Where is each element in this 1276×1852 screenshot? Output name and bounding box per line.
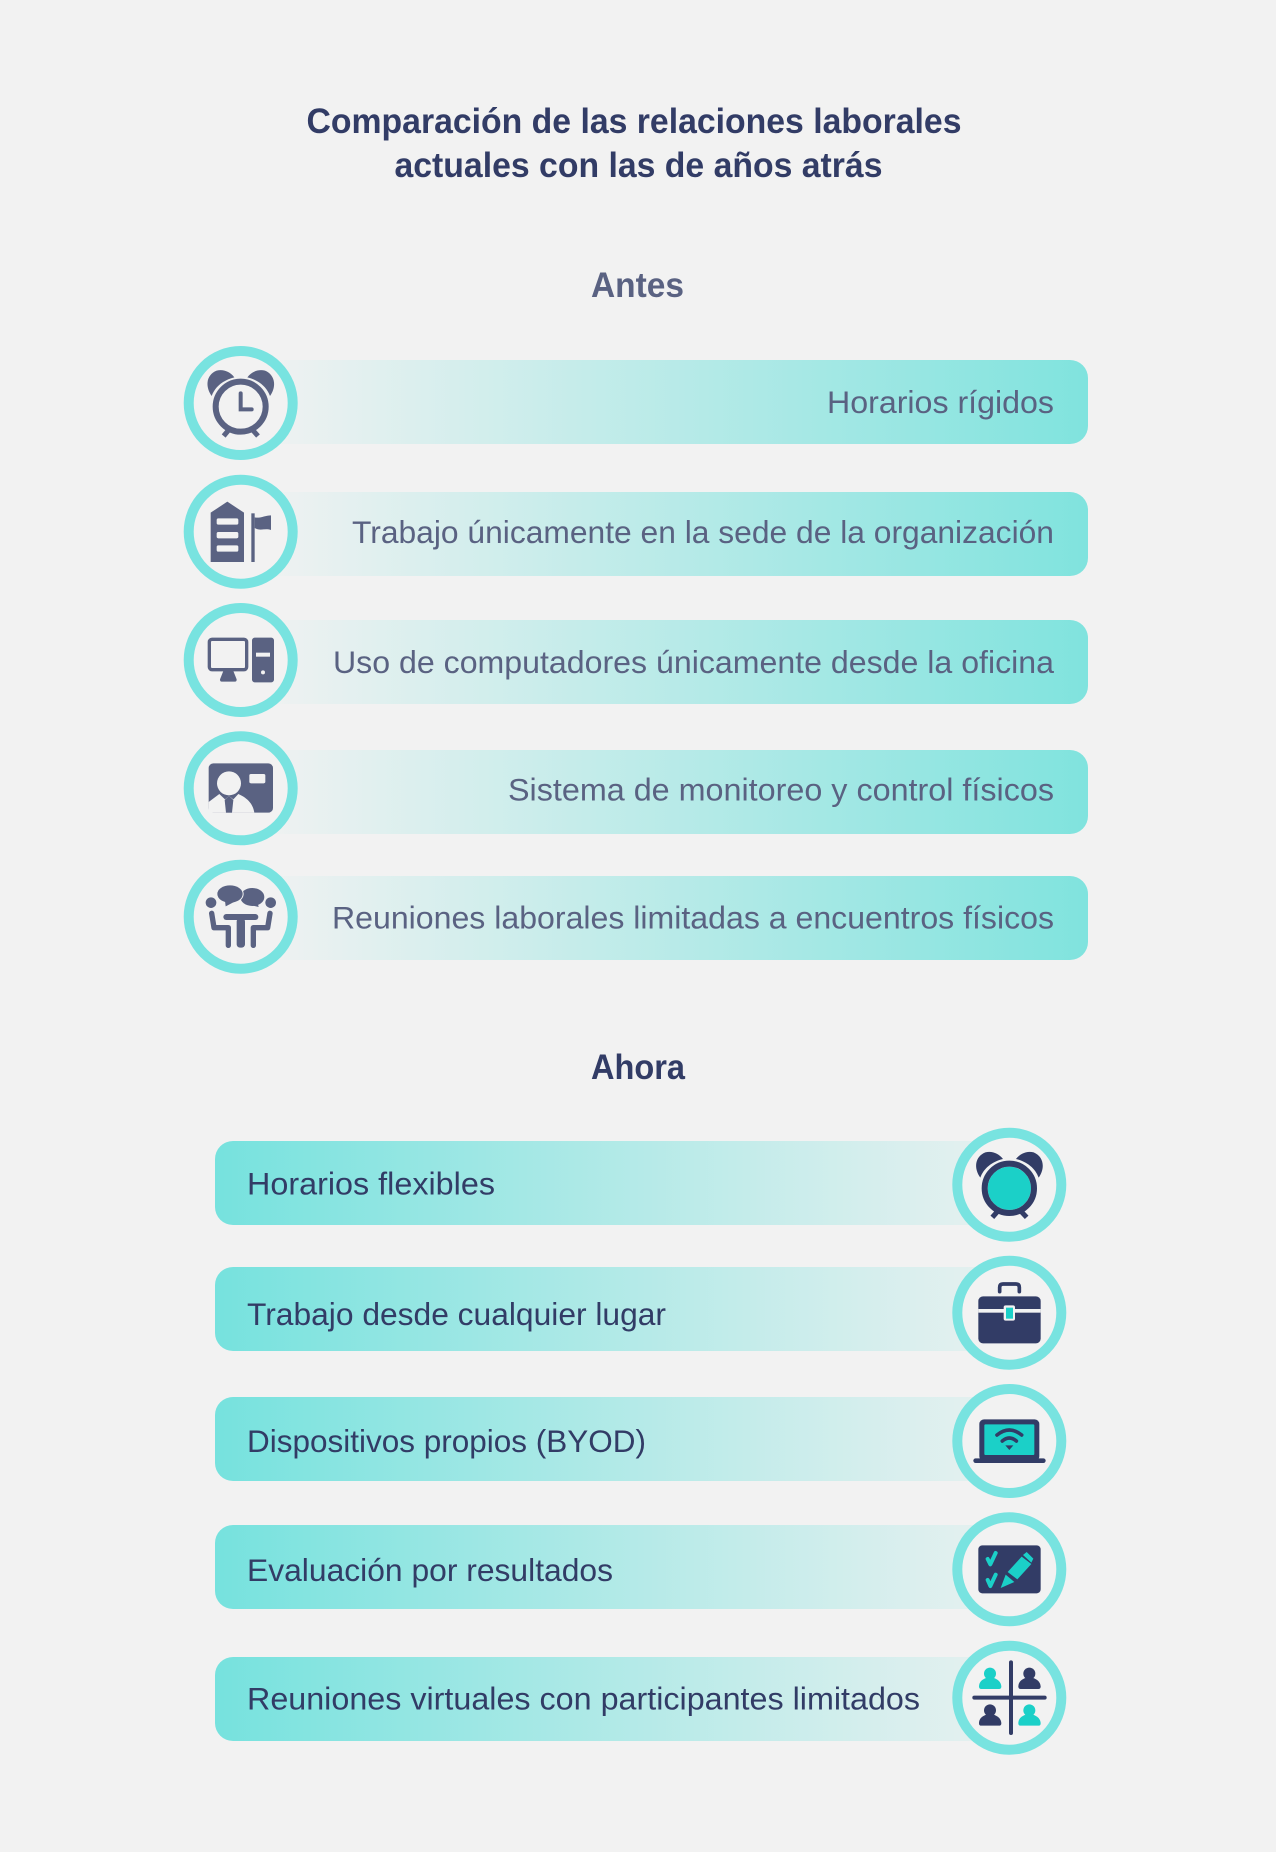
label: Dispositivos propios (BYOD) — [247, 1423, 646, 1459]
icon: briefcase — [978, 1284, 1041, 1343]
row: Dispositivos propios — [215, 1389, 1061, 1493]
row: Uso de computadores — [189, 608, 1088, 712]
bar — [245, 492, 1088, 576]
ring — [957, 1133, 1061, 1237]
row: Evaluación por resultados — [215, 1517, 1061, 1621]
icon: alarm clock teal — [976, 1152, 1043, 1217]
title: actuales con las de años atrás — [394, 146, 882, 185]
label: Horarios rígidos — [827, 384, 1054, 420]
label: Uso de computadores únicamente desde la oficina — [333, 644, 1054, 680]
ring — [957, 1261, 1061, 1365]
ring — [189, 351, 293, 455]
bar — [215, 1141, 1040, 1225]
bar — [245, 750, 1088, 834]
label: Reuniones virtuales con participantes limitados — [247, 1680, 920, 1716]
label: Evaluación por resultados — [247, 1552, 613, 1588]
row: Reuniones virtuales — [215, 1646, 1061, 1750]
icon: checklist board and pencil — [978, 1545, 1041, 1593]
title: Comparación de las relaciones laborales — [306, 102, 962, 141]
ring — [189, 736, 293, 840]
title — [306, 102, 962, 185]
bar — [245, 876, 1088, 960]
icon: alarm clock — [207, 370, 274, 436]
panel: Antes list — [189, 351, 1088, 969]
bar — [215, 1525, 1040, 1609]
row: Reuniones físicas — [189, 865, 1088, 969]
row: Trabajo desde cualquier lugar — [215, 1261, 1061, 1365]
icon: building and flag — [211, 502, 271, 562]
bar — [215, 1397, 1040, 1481]
heading: Antes: Antes — [591, 266, 684, 305]
heading: Ahora: Ahora — [591, 1048, 685, 1087]
row: Horarios flexibles — [215, 1133, 1061, 1237]
row: Trabajo en la sede — [189, 480, 1088, 584]
ring — [189, 865, 293, 969]
panel: Ahora list — [215, 1133, 1061, 1750]
bar — [245, 620, 1088, 704]
ring — [957, 1389, 1061, 1493]
icon: laptop with wifi — [973, 1419, 1046, 1463]
icon: employee badge — [209, 763, 273, 813]
icon: desktop computer — [209, 638, 274, 682]
bar — [215, 1267, 1040, 1351]
ring — [189, 480, 293, 584]
ring — [957, 1517, 1061, 1621]
label: Horarios flexibles — [247, 1166, 495, 1202]
label: Reuniones laborales limitadas a encuentros físicos — [332, 900, 1054, 936]
label: Sistema de monitoreo y control físicos — [508, 772, 1054, 808]
icon: meeting table — [206, 884, 276, 948]
ring — [189, 608, 293, 712]
label: Trabajo desde cualquier lugar — [247, 1296, 666, 1332]
row: Horarios rígidos — [189, 351, 1088, 455]
row: Sistema de monitoreo — [189, 736, 1088, 840]
bar — [245, 360, 1088, 444]
label: Trabajo únicamente en la sede de la organización — [352, 514, 1054, 550]
ring — [957, 1646, 1061, 1750]
icon: video call grid — [972, 1660, 1047, 1735]
bar — [215, 1657, 1040, 1741]
